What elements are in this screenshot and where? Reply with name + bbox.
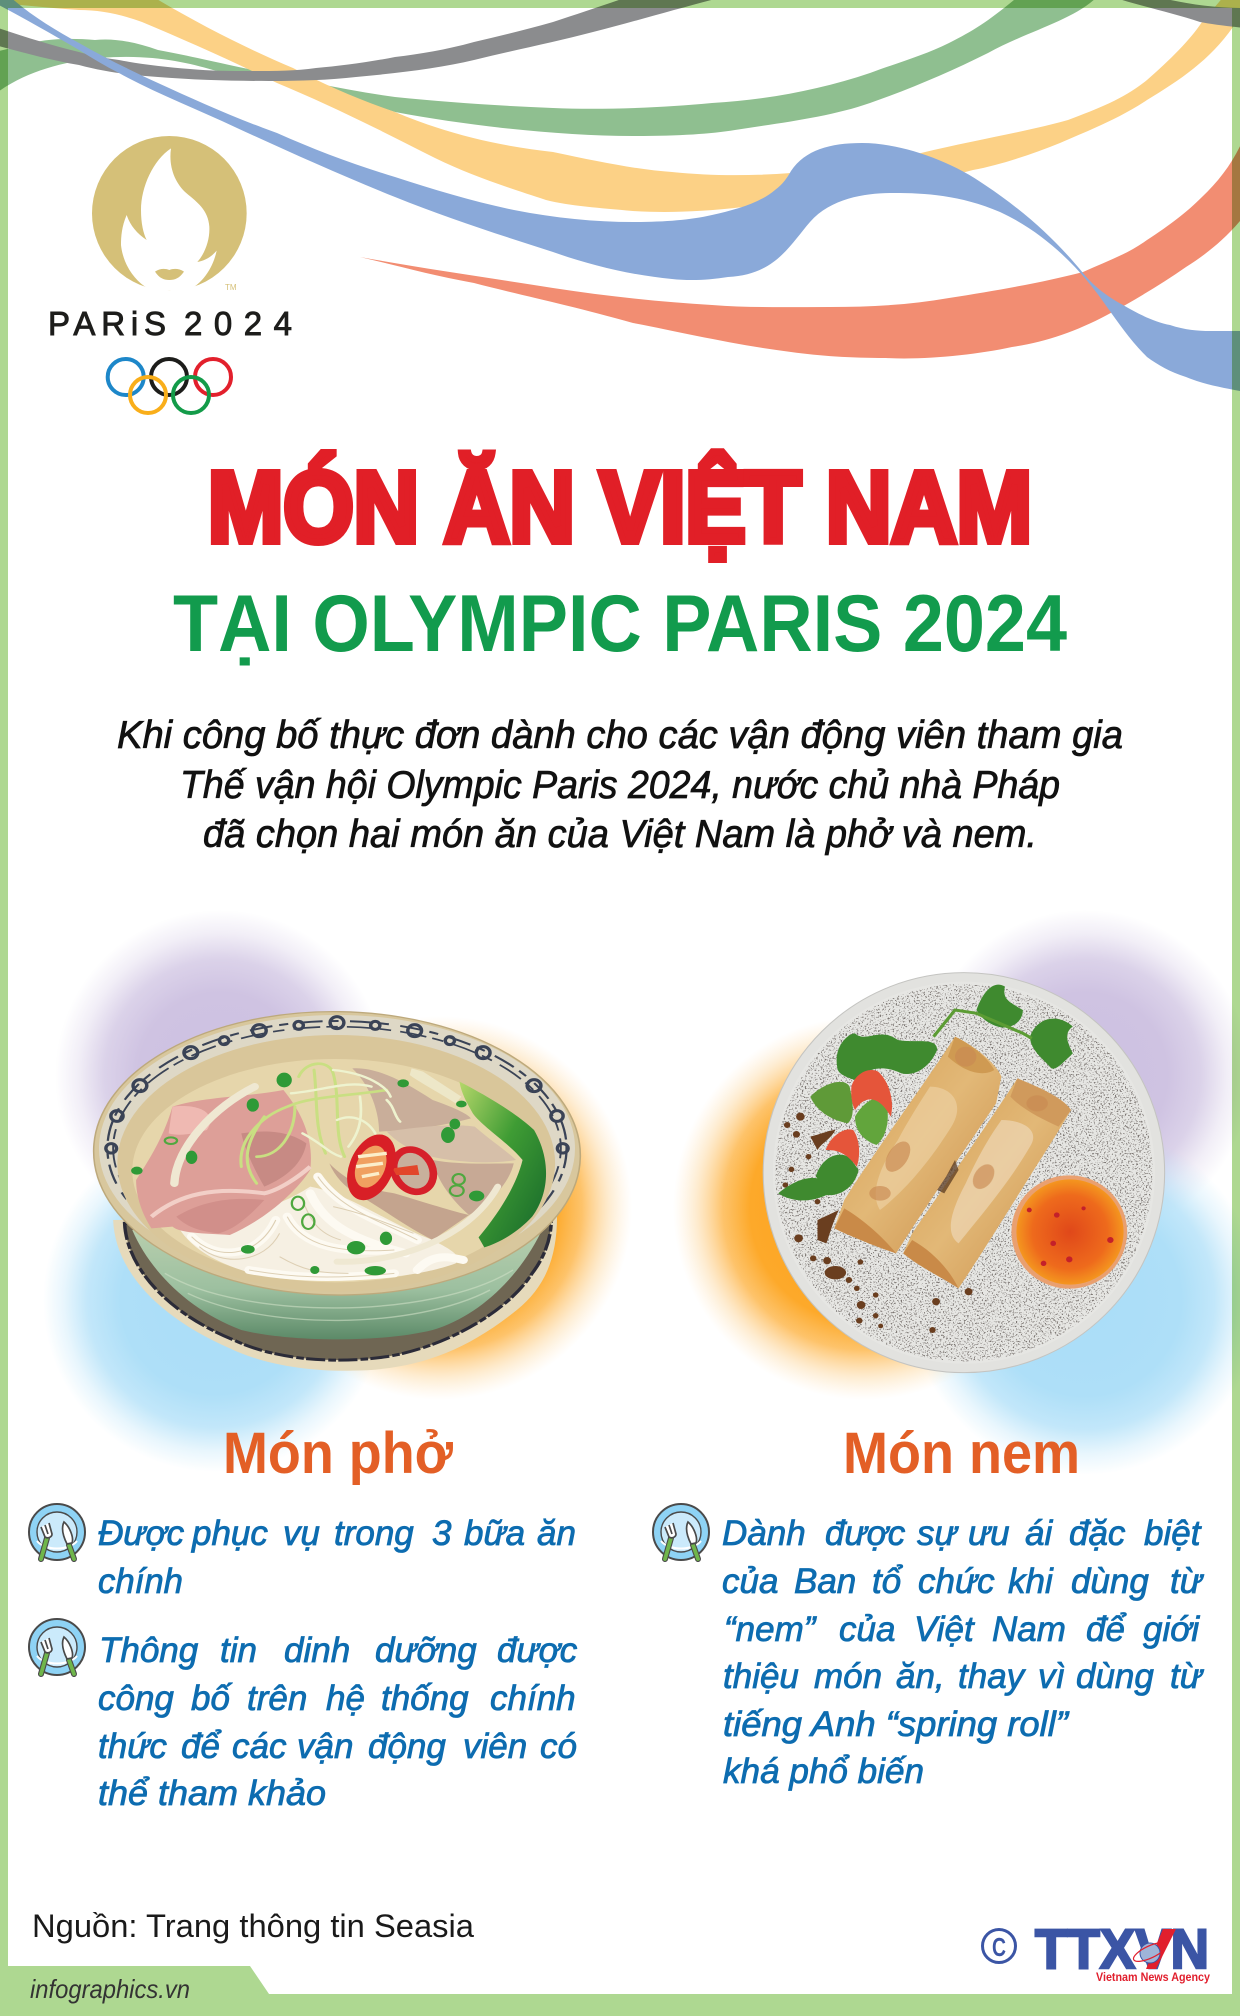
- nem point: đặc: [1069, 1514, 1135, 1553]
- phở point two: bố: [191, 1679, 240, 1718]
- nem point: tiếng Anh “spring roll”: [723, 1705, 1069, 1744]
- phở point two: động: [368, 1727, 456, 1766]
- intro text: [117, 714, 1123, 856]
- spring rolls: [834, 1037, 1001, 1253]
- Olympic rings: [108, 359, 231, 413]
- panel: phở: [43, 910, 632, 1472]
- Paris 2024 wordmark: [48, 305, 292, 342]
- nem point: Nam: [992, 1610, 1076, 1649]
- scroll pattern band: [106, 1017, 568, 1276]
- nem point: thay: [958, 1657, 1034, 1696]
- phở point one: trong: [334, 1514, 424, 1553]
- Paris 2024 wordmark: 2024: [184, 305, 292, 342]
- phở point one: chính: [98, 1562, 183, 1601]
- phở point one: ăn: [537, 1514, 576, 1553]
- nem point: từ: [1170, 1562, 1205, 1601]
- tomatoes: [851, 1070, 892, 1117]
- nem point: của: [839, 1610, 905, 1649]
- Paris 2024 logo: [48, 136, 292, 413]
- phở point two: có: [540, 1727, 577, 1766]
- nem point: của: [722, 1562, 788, 1601]
- bok choy: [410, 1068, 461, 1103]
- nem point: ái: [1025, 1514, 1062, 1553]
- TTXVN logo: TTXVN: [1035, 1917, 1209, 1980]
- nem point: vì: [1038, 1657, 1075, 1696]
- nem point: Ban: [794, 1562, 866, 1601]
- illustration: plate of spring rolls: [763, 973, 1165, 1373]
- nem point: để: [1086, 1610, 1135, 1649]
- phở point two: dinh: [284, 1631, 360, 1670]
- phở point two: trên: [247, 1679, 317, 1718]
- source: Nguồn: Trang thông tin Seasia: [32, 1908, 474, 1944]
- nem point: Dành: [722, 1514, 815, 1553]
- heading: Món nem: Món nem: [843, 1421, 1080, 1486]
- phở point two: tin: [220, 1631, 267, 1670]
- herbs: [778, 985, 1073, 1200]
- brown glaze spots: [782, 1113, 972, 1333]
- nem point: món: [814, 1657, 892, 1696]
- phở point one: Được: [98, 1514, 194, 1553]
- phở point two: hệ: [326, 1679, 375, 1718]
- TTXVN logo: Vietnam News Agency: [1096, 1970, 1210, 1984]
- phở point two: để: [181, 1727, 230, 1766]
- phở point two: chính: [490, 1679, 576, 1718]
- title: MÓN ĂN VIỆT NAM: [208, 452, 1032, 564]
- subtitle: TẠI OLYMPIC PARIS 2024: [173, 579, 1067, 669]
- background ribbons: [0, 0, 1240, 392]
- colour glow: [43, 910, 632, 1472]
- icon: plate and cutlery: [653, 1504, 709, 1560]
- intro text: đã chọn hai món ăn của Việt Nam là phở và nem.: [203, 813, 1037, 856]
- nem point: dùng: [1076, 1657, 1164, 1696]
- phở point two: thống: [381, 1679, 478, 1718]
- nem point: thiệu: [723, 1657, 809, 1696]
- trademark: TM: [225, 283, 237, 292]
- phở point two: viên: [463, 1727, 537, 1766]
- colour glow: [673, 910, 1240, 1475]
- Paris 2024 wordmark: PARiS: [48, 305, 166, 342]
- dipping sauce: [1011, 1175, 1127, 1289]
- nem point: “nem”: [724, 1610, 825, 1649]
- nem point: được: [825, 1514, 915, 1553]
- nem point: [722, 1514, 1205, 1791]
- phở point two: Thông: [99, 1631, 208, 1670]
- site name: infographics.vn: [30, 1974, 190, 2004]
- nem point: ưu: [968, 1514, 1019, 1553]
- phở point two: [98, 1631, 578, 1813]
- intro text: Thế vận hội Olympic Paris 2024, nước chủ nhà Pháp: [180, 764, 1060, 807]
- noodles: [180, 1187, 458, 1281]
- nem point: khi: [1008, 1562, 1062, 1601]
- nem point: khá phổ biến: [723, 1752, 924, 1791]
- nem point: từ: [1170, 1657, 1205, 1696]
- nem point: giới: [1143, 1610, 1200, 1649]
- phở point one: vụ: [283, 1514, 330, 1553]
- copyright mark: [982, 1930, 1016, 1962]
- nem point: sự: [917, 1514, 966, 1553]
- phở point one: [98, 1514, 576, 1601]
- nem point: ăn,: [896, 1657, 954, 1696]
- phở point one: 3: [432, 1514, 461, 1553]
- illustration: bowl of phở: [91, 1008, 583, 1371]
- cooked beef: [352, 1068, 471, 1132]
- copyright mark: C: [992, 1932, 1006, 1962]
- phở point two: thể tham khảo: [98, 1774, 326, 1813]
- nem point: Việt: [914, 1610, 983, 1649]
- phở point two: dưỡng: [375, 1631, 486, 1670]
- nem point: dùng: [1071, 1562, 1159, 1601]
- phở point one: phục: [191, 1514, 278, 1553]
- nem point: tổ: [872, 1562, 911, 1601]
- phở point two: các: [232, 1727, 296, 1766]
- phở point two: thức: [98, 1727, 177, 1766]
- intro text: Khi công bố thực đơn dành cho các vận động viên tham gia: [117, 714, 1123, 757]
- chili slices: [382, 1140, 445, 1201]
- phở point one: bữa: [464, 1514, 535, 1553]
- nem point: biệt: [1144, 1514, 1202, 1553]
- icon: plate and cutlery: [29, 1619, 85, 1675]
- onion slices: [174, 1087, 498, 1262]
- nem point: chức: [918, 1562, 1004, 1601]
- shaved scallion: [241, 1064, 400, 1183]
- rare beef: [136, 1090, 311, 1235]
- flame emblem: [92, 136, 247, 291]
- phở point two: vận: [297, 1727, 363, 1766]
- phở point two: được: [497, 1631, 578, 1670]
- phở point two: công: [98, 1679, 184, 1718]
- panel: nem: [673, 910, 1240, 1475]
- icon: plate and cutlery: [29, 1504, 85, 1560]
- heading: Món phở: Món phở: [223, 1421, 454, 1486]
- green onion pieces: [131, 1073, 484, 1275]
